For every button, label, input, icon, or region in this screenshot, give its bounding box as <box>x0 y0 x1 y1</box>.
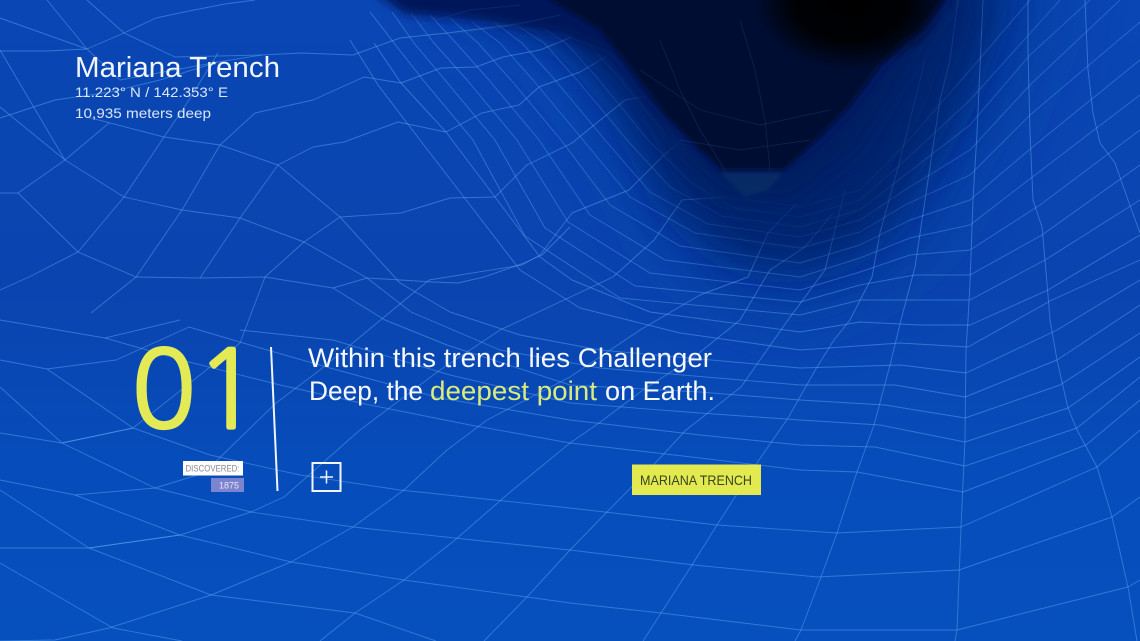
divider <box>271 347 278 491</box>
header block <box>75 52 280 121</box>
trench depth shading <box>430 0 1050 300</box>
label button: Mariana Trench: MARIANA TRENCH <box>640 472 752 488</box>
tag: year <box>211 478 244 492</box>
statement text: Within this trench lies Challenger <box>308 343 712 373</box>
big number: 1 <box>195 336 260 444</box>
statement text: Deep, the <box>309 376 423 406</box>
trench dark pit <box>372 0 955 197</box>
statement text <box>308 343 715 406</box>
tag: discovered <box>183 461 243 476</box>
trench wall shadow over mesh <box>400 0 995 262</box>
depth: 10,935 meters deep <box>75 105 211 121</box>
tag: year: 1875 <box>219 480 239 490</box>
icon: plus button <box>312 463 340 491</box>
title: Mariana Trench <box>75 52 280 84</box>
big number <box>131 336 260 444</box>
highlighted phrase: deepest point <box>430 376 598 406</box>
tag: discovered: DISCOVERED: <box>186 464 240 474</box>
coordinates: 11.223° N / 142.353° E <box>75 85 228 100</box>
big number: 0 <box>131 336 196 444</box>
statement text: on Earth. <box>605 376 715 406</box>
label button: Mariana Trench <box>632 464 761 495</box>
